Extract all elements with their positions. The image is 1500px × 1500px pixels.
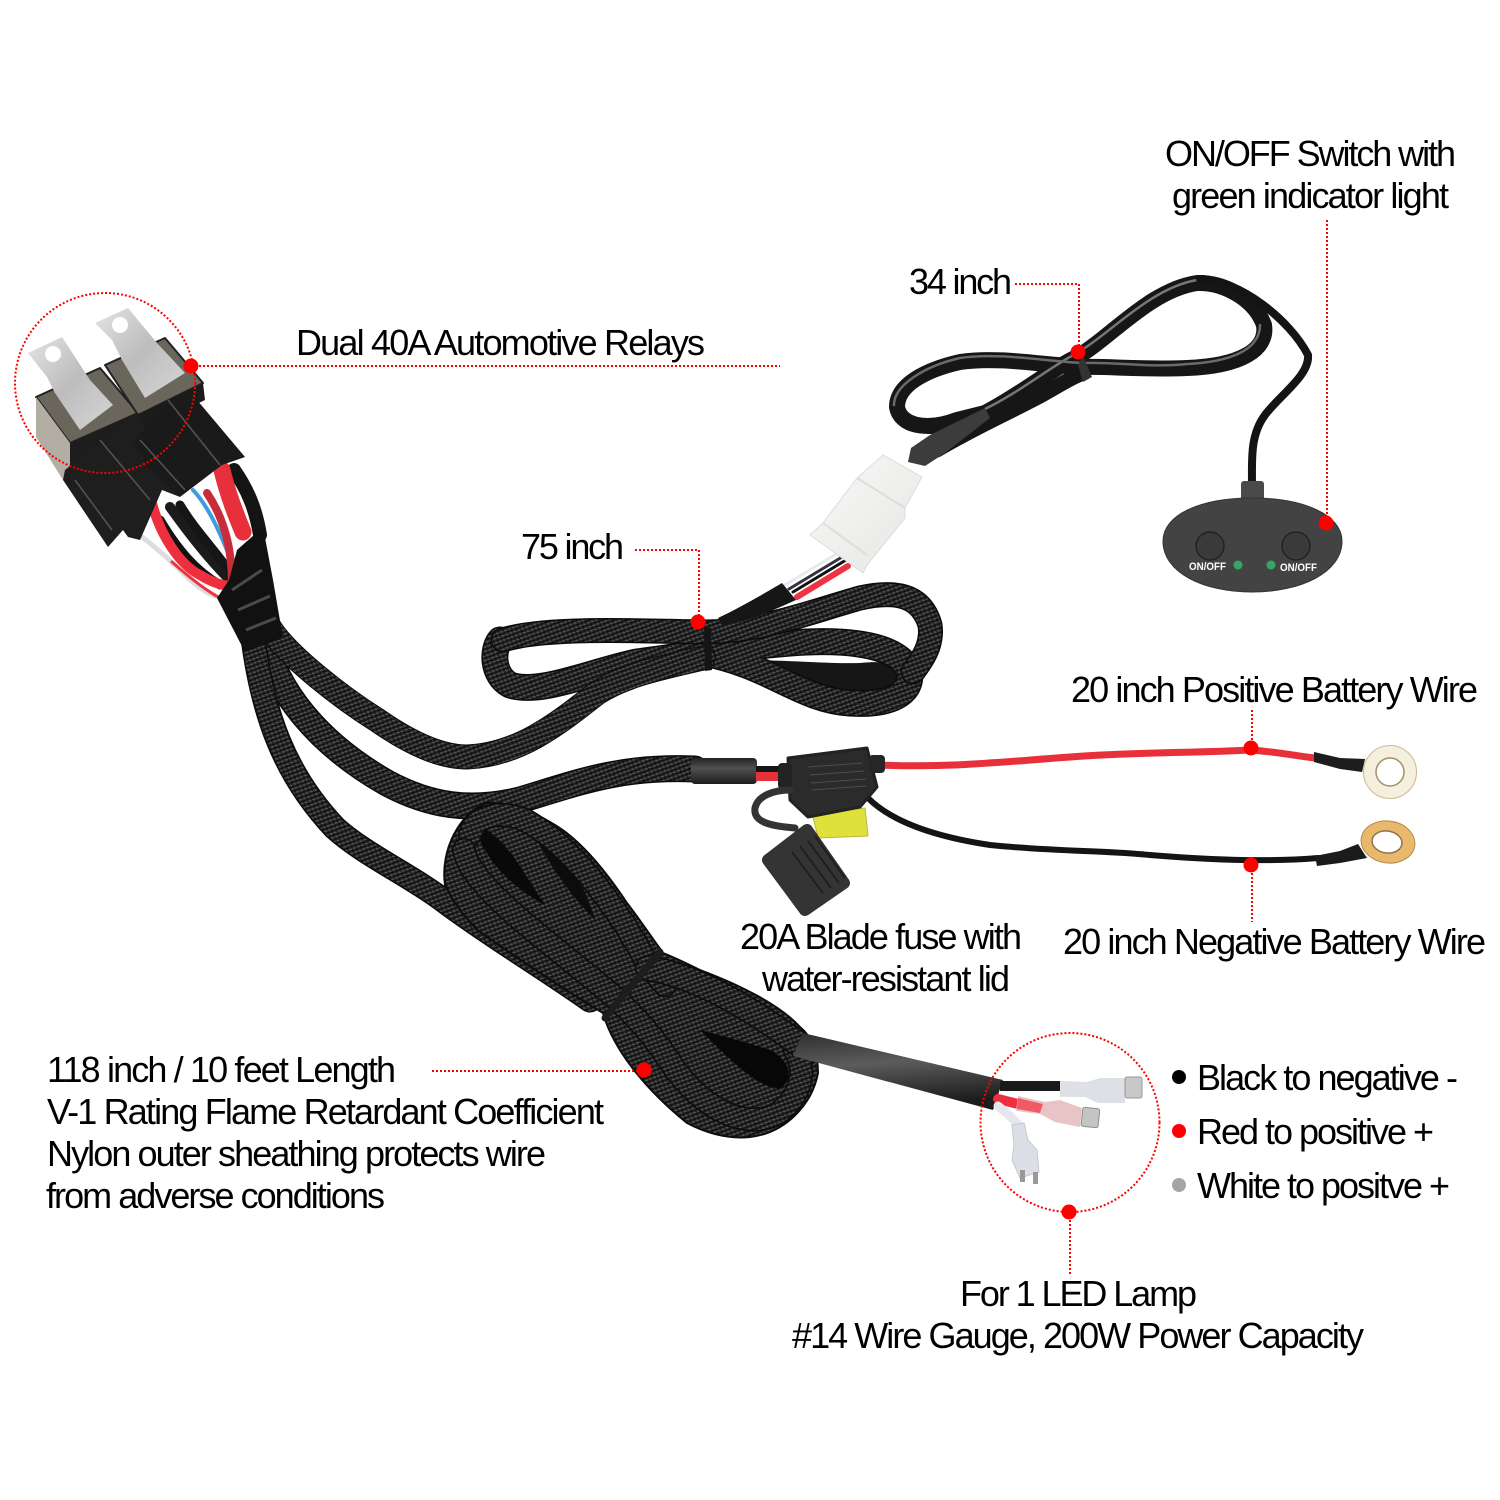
callout: positive battery wire <box>1071 669 1478 756</box>
yellow blade fuse <box>812 808 868 838</box>
negative ring terminal <box>1315 817 1418 867</box>
callout: relays: Dual 40A Automotive Relays <box>296 322 705 363</box>
legend item: black: Black to negative - <box>1197 1057 1458 1098</box>
callout: blade fuse: water-resistant lid <box>761 958 1010 999</box>
callout: cable length and sheathing: Nylon outer sheathing protects wire <box>47 1133 546 1174</box>
cable tie on switch cable <box>1078 356 1092 382</box>
braided harness branch to lamp coil <box>252 630 590 1000</box>
cable tie on 75 inch coil <box>704 628 712 671</box>
lamp lead terminals <box>998 1077 1142 1184</box>
callout: 34 inch: 34 inch <box>909 261 1012 302</box>
right relay body <box>105 338 205 432</box>
legend item: white: White to positve + <box>1197 1165 1450 1206</box>
callout: LED lamp leads <box>792 1033 1364 1356</box>
cable tie on coil <box>605 952 660 1018</box>
34 inch black switch cable coil <box>894 279 1308 484</box>
heat shrink to lamp leads <box>793 1033 1003 1110</box>
callout: negative battery wire <box>1063 858 1486 962</box>
left metal bracket <box>28 337 113 430</box>
heat shrink to fuse <box>691 758 757 784</box>
left button <box>1196 532 1224 560</box>
relays and wiring loom <box>28 308 283 652</box>
callout: switch: green indicator light <box>1172 175 1449 216</box>
legend item: red: Red to positive + <box>1197 1111 1434 1152</box>
callout: LED lamp leads: #14 Wire Gauge, 200W Power Capacity <box>792 1315 1364 1356</box>
positive ring terminal <box>1314 746 1416 798</box>
callout: LED lamp leads: For 1 LED Lamp <box>960 1273 1197 1314</box>
inline blade fuse holder <box>691 748 885 910</box>
coil strands <box>464 815 801 1119</box>
right metal bracket <box>95 308 185 398</box>
callout: positive battery wire: 20 inch Positive Battery Wire <box>1071 669 1478 710</box>
water-resistant lid <box>768 830 844 910</box>
callout: 34 inch <box>909 261 1086 360</box>
heat shrink and wires to white connector <box>718 553 848 626</box>
callout: negative battery wire: 20 inch Negative Battery Wire <box>1063 921 1486 962</box>
right button <box>1282 532 1310 560</box>
left relay body <box>36 368 138 480</box>
right relay socket <box>133 400 245 497</box>
lid strap <box>755 790 795 828</box>
large braided 118 inch coil <box>444 803 818 1137</box>
white multi-pin connector <box>810 455 922 573</box>
electrical tape wrap <box>217 527 283 652</box>
callout: relays <box>15 293 780 473</box>
switch labels: ON/OFF <box>1280 562 1317 574</box>
switch labels: ON/OFF <box>1189 561 1226 573</box>
loom wires <box>127 470 260 598</box>
black negative battery wire <box>868 798 1418 867</box>
green indicator lights <box>1234 560 1276 570</box>
heat shrink on switch cable <box>908 408 990 466</box>
braided 75 inch coil <box>268 595 931 757</box>
callout: cable length and sheathing <box>46 1049 652 1216</box>
legend: wire colours <box>1172 1057 1458 1206</box>
coil shadow gaps <box>477 825 545 905</box>
callout: cable length and sheathing: V-1 Rating Flame Retardant Coefficient <box>47 1091 604 1132</box>
black lead terminal <box>1000 1077 1142 1103</box>
braided harness branch to fuse <box>262 628 695 806</box>
switch labels <box>1189 561 1317 574</box>
callout: blade fuse: 20A Blade fuse with <box>740 916 1022 957</box>
callout: 75 inch: 75 inch <box>521 526 624 567</box>
callout: 75 inch <box>521 526 706 630</box>
left relay socket <box>63 413 180 547</box>
dual ON/OFF switch <box>1163 481 1342 592</box>
red lead terminal <box>998 1096 1100 1128</box>
callout: switch <box>1165 133 1456 530</box>
fuse holder body <box>788 748 877 817</box>
callout: cable length and sheathing: from adverse conditions <box>46 1175 385 1216</box>
fill between lower strands <box>740 660 908 698</box>
red positive battery wire <box>880 746 1416 798</box>
callout: blade fuse <box>740 916 1022 999</box>
callout: switch: ON/OFF Switch with <box>1165 133 1456 174</box>
callout: cable length and sheathing: 118 inch / 10 feet Length <box>47 1049 396 1090</box>
white lead terminal <box>998 1106 1039 1184</box>
